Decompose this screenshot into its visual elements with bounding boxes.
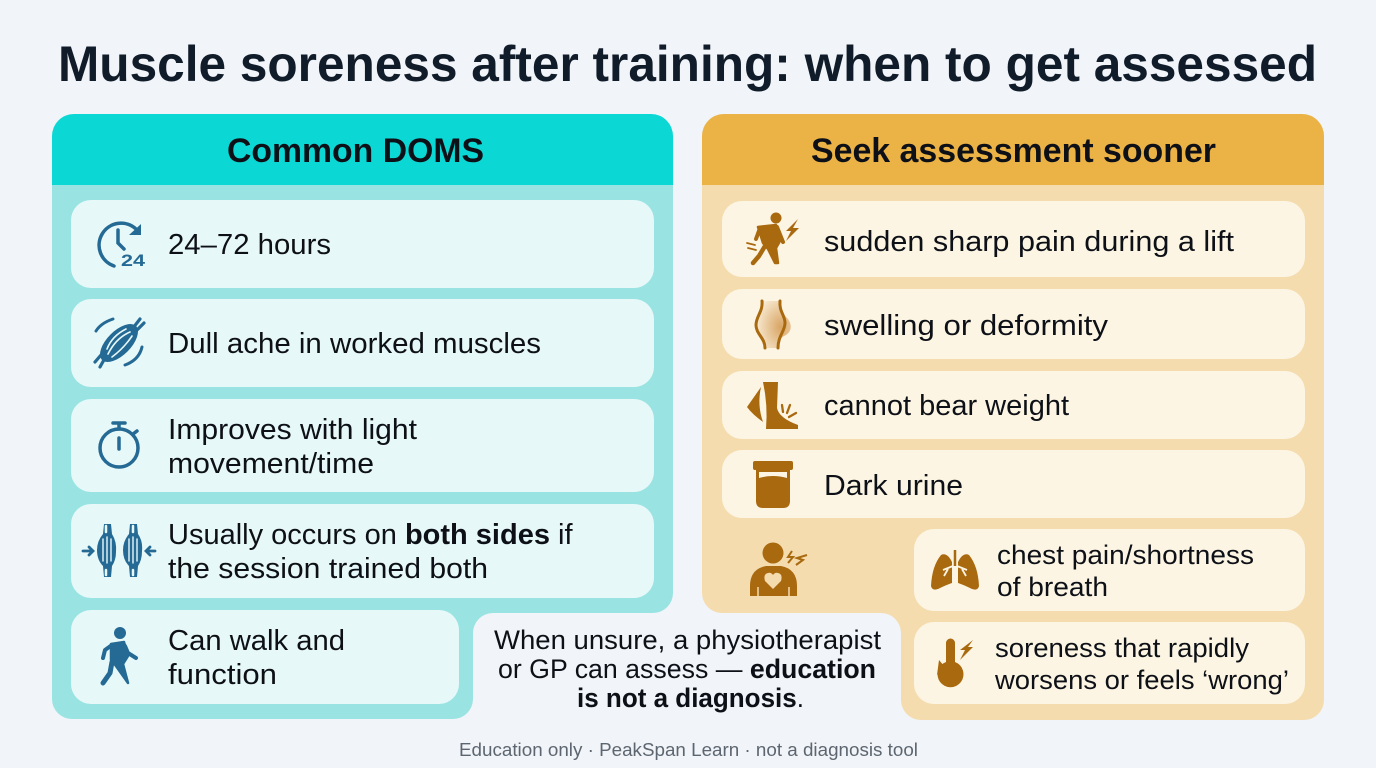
item: swelling <box>722 289 1305 359</box>
icon: stopwatch <box>100 423 138 467</box>
icon: paired muscles with arrows <box>83 524 155 577</box>
footer: Education only · PeakSpan Learn · not a diagnosis tool <box>459 740 918 760</box>
callout: when unsure: or GP can assess — education <box>498 654 876 684</box>
item: dull ache <box>71 299 654 387</box>
icon: walking person <box>103 627 136 683</box>
panel: seek assessment sooner <box>702 114 1324 720</box>
heading: seek assessment sooner <box>702 114 1324 185</box>
callout: when unsure: When unsure, a physiotherapist <box>494 625 882 655</box>
item: rapidly worsening soreness <box>914 622 1305 704</box>
item: can walk: Can walk and <box>168 625 345 657</box>
item: can walk: function <box>168 659 277 691</box>
item: both sides <box>71 504 654 598</box>
icon: specimen cup <box>753 461 793 508</box>
item: chest pain <box>914 529 1305 611</box>
item: dark urine <box>722 450 1305 518</box>
callout: when unsure: is not a diagnosis. <box>577 683 804 713</box>
item: rapidly worsening soreness: soreness that rapidly <box>995 633 1249 663</box>
icon: person with heart pain <box>750 542 807 596</box>
callout: when unsure <box>494 625 882 713</box>
heading: seek assessment sooner: Seek assessment sooner <box>811 132 1216 170</box>
item: swelling: swelling or deformity <box>824 310 1109 342</box>
item: improves with light movement: movement/time <box>168 448 374 480</box>
icon: clock 24: 24 <box>121 251 146 270</box>
item: chest pain: of breath <box>997 572 1108 602</box>
item: both sides: the session trained both <box>168 553 488 585</box>
heading: common DOMS: Common DOMS <box>227 132 484 170</box>
icon: clock 24 <box>99 223 146 270</box>
icon: muscle <box>94 318 144 368</box>
item: rapidly worsening soreness: worsens or feels ‘wrong’ <box>994 665 1289 695</box>
title: Muscle soreness after training: when to get assessed <box>58 36 1317 92</box>
icon: foot <box>747 382 798 429</box>
panel: common DOMS <box>52 114 673 719</box>
item: cannot bear weight <box>722 371 1305 439</box>
item: dull ache: Dull ache in worked muscles <box>168 328 541 360</box>
item: improves with light movement <box>71 399 654 492</box>
item: 24–72 hours <box>71 200 654 288</box>
item: both sides: Usually occurs on both sides if <box>168 519 573 551</box>
item: sudden sharp pain <box>722 201 1305 277</box>
icon: person with lightning <box>747 212 799 263</box>
item: 24–72 hours: 24–72 hours <box>168 229 331 261</box>
item: chest pain: chest pain/shortness <box>997 540 1254 570</box>
item: sudden sharp pain: sudden sharp pain during a lift <box>824 226 1234 258</box>
item: improves with light movement: Improves with light <box>168 414 417 446</box>
icon: lungs <box>931 550 979 590</box>
item: can walk <box>71 610 459 704</box>
item: cannot bear weight: cannot bear weight <box>824 390 1069 422</box>
icon: swollen joint <box>756 301 791 348</box>
icon: thermometer <box>937 638 973 687</box>
heading: common DOMS <box>52 114 673 185</box>
item: dark urine: Dark urine <box>824 470 963 502</box>
